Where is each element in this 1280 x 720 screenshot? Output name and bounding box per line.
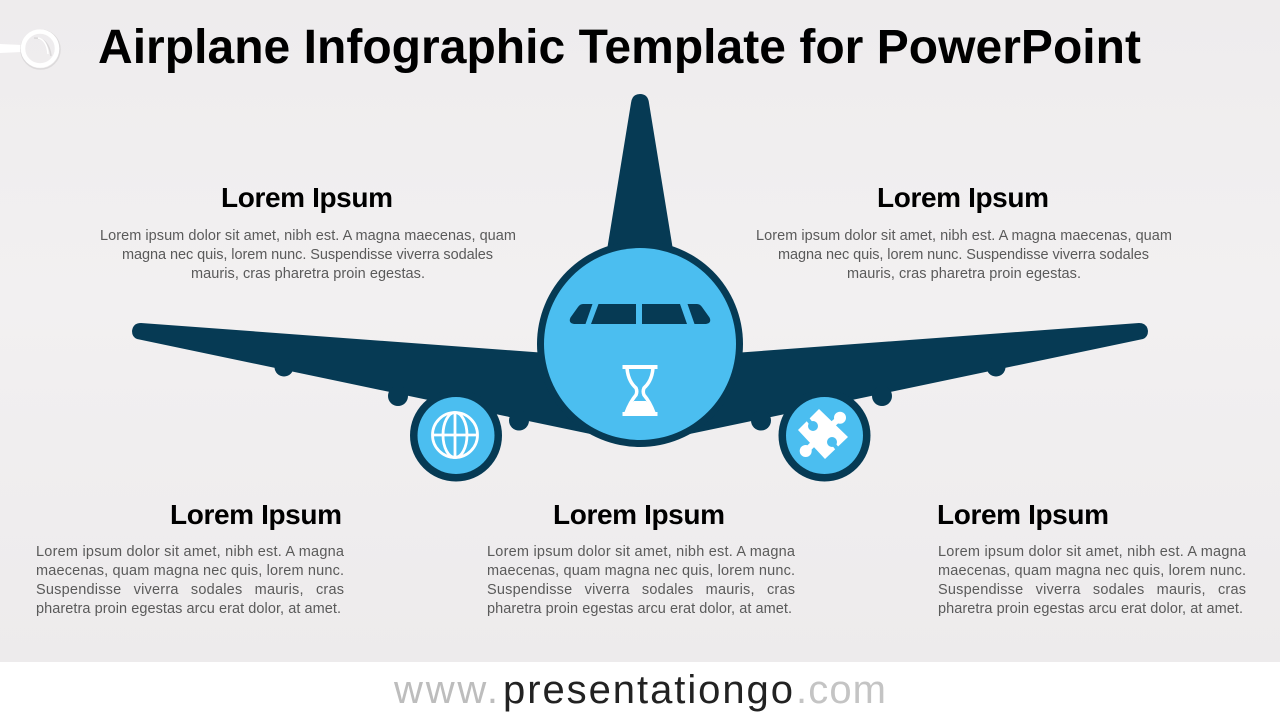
body: magna nec quis, lorem nunc. Suspendisse viverra sodales [778,247,1149,263]
fuselage [537,241,743,447]
body [938,544,1247,617]
body: Lorem ipsum dolor sit amet, nibh est. A magna [938,544,1247,560]
footer website address: presentationgo [503,668,793,712]
icon: globe [432,412,478,458]
text block: top right [756,182,1172,282]
body: maecenas, quam magna nec quis, lorem nunc. [36,563,344,579]
text block: top left [100,182,516,282]
text block: bottom left [36,499,345,617]
body: maecenas, quam magna nec quis, lorem nunc. [487,563,795,579]
tail fin [607,94,673,250]
heading: Lorem Ipsum [877,182,1049,213]
right engine [778,390,870,482]
heading: Lorem Ipsum [937,499,1109,530]
cockpit windows [570,304,710,324]
body: pharetra proin egestas arcu erat dolor, at amet. [938,601,1243,617]
icon: puzzle piece [798,409,848,459]
text block: bottom right [937,499,1247,617]
body: Lorem ipsum dolor sit amet, nibh est. A magna [487,544,796,560]
left wing [132,323,600,436]
icon: hourglass [622,365,658,416]
body: pharetra proin egestas arcu erat dolor, at amet. [487,601,792,617]
body [100,228,516,282]
body: mauris, cras pharetra proin egestas. [191,266,425,282]
heading: Lorem Ipsum [553,499,725,530]
body: Suspendisse viverra sodales mauris, cras [36,582,344,598]
body: mauris, cras pharetra proin egestas. [847,266,1081,282]
footer website address: www. [393,668,498,712]
footer website address: .com [796,668,886,712]
body: pharetra proin egestas arcu erat dolor, at amet. [36,601,341,617]
body [756,228,1172,282]
body: Suspendisse viverra sodales mauris, cras [938,582,1246,598]
icon: hanging tag ring [0,30,60,69]
text block: bottom center [487,499,796,617]
title: Airplane Infographic Template for PowerPoint [98,21,1141,74]
airplane illustration [132,94,1148,482]
right wing [680,323,1148,436]
footer website address [393,668,886,712]
body [36,544,345,617]
body: magna nec quis, lorem nunc. Suspendisse viverra sodales [122,247,493,263]
body: Lorem ipsum dolor sit amet, nibh est. A magna maecenas, quam [100,228,516,244]
left engine [410,390,502,482]
body: maecenas, quam magna nec quis, lorem nunc. [938,563,1246,579]
heading: Lorem Ipsum [221,182,393,213]
body: Lorem ipsum dolor sit amet, nibh est. A magna maecenas, quam [756,228,1172,244]
body: Suspendisse viverra sodales mauris, cras [487,582,795,598]
heading: Lorem Ipsum [170,499,342,530]
body: Lorem ipsum dolor sit amet, nibh est. A magna [36,544,345,560]
body [487,544,796,617]
